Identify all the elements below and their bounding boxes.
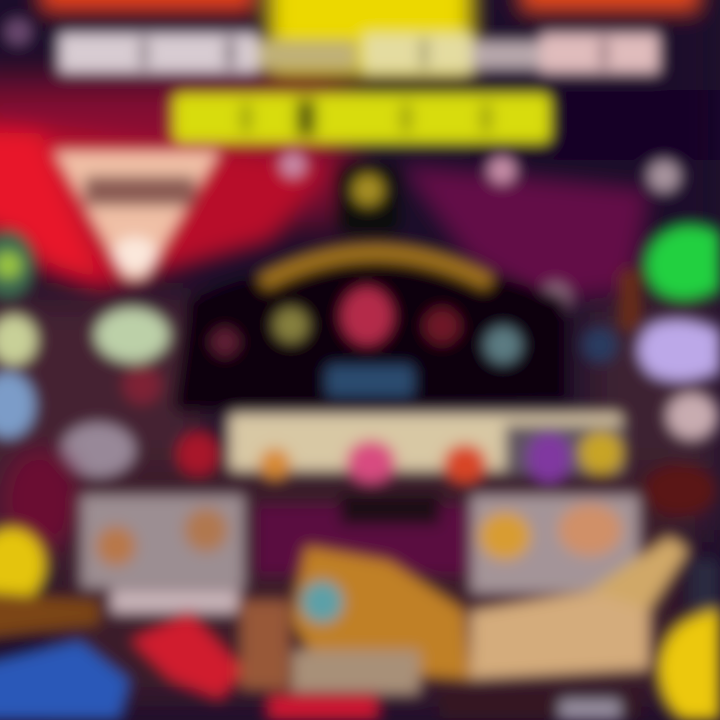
panel: lower right cards [470,494,640,594]
bottom left character [0,527,378,720]
panel: maroon curtain right [400,165,650,300]
panel: lower centre curtain [255,495,470,575]
title line one [58,32,660,74]
panel: lower left cards [80,494,245,614]
small stars [4,18,681,315]
title line two [172,92,552,144]
gold treasure chest [290,535,690,695]
callout: triangle badge [52,150,222,280]
top glow banner [40,0,700,75]
right side icons [620,225,720,516]
slot symbols row [210,286,618,398]
maroon left accent [2,448,78,552]
bottom right character [440,560,720,720]
left side icons [0,231,220,478]
panel: red spotlight left [0,120,330,290]
slot machine body [175,165,565,410]
reels panel [228,412,625,484]
